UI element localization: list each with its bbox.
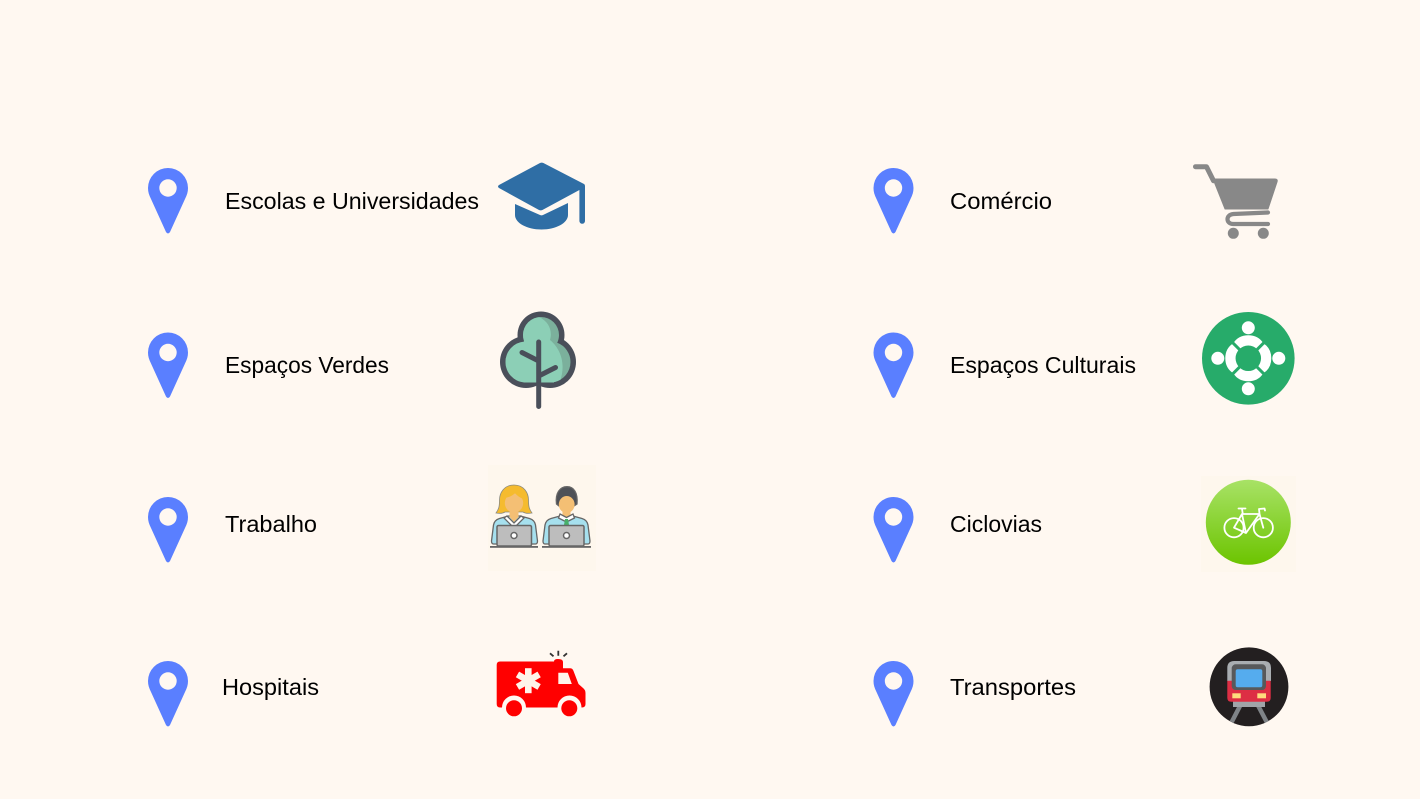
label: Ciclovias [950, 511, 1042, 537]
list item: Comércio [874, 167, 1277, 239]
icon: graduation cap [498, 163, 585, 230]
icon: location pin [148, 332, 188, 398]
label: Espaços Culturais [950, 352, 1136, 378]
list item: Ciclovias [874, 476, 1296, 572]
label: Transportes [950, 674, 1076, 700]
label: Escolas e Universidades [225, 188, 479, 214]
icon: people around a table [1202, 312, 1295, 405]
list item: Trabalho [148, 465, 596, 571]
list item: Espaços Culturais [874, 312, 1295, 405]
icon: shopping cart [1196, 167, 1277, 239]
icon: location pin [874, 168, 914, 234]
icon: ambulance [497, 651, 586, 716]
icon: location pin [874, 332, 914, 398]
woman [492, 485, 538, 546]
icon: location pin [874, 661, 914, 726]
list item: Hospitais [148, 651, 586, 726]
icon: bicycle badge [1201, 476, 1296, 572]
icon: location pin [874, 497, 914, 562]
label: Comércio [950, 188, 1052, 214]
list item: Transportes [874, 647, 1288, 726]
icon: location pin [148, 168, 188, 234]
icon: two workers with laptops [488, 465, 596, 571]
icon: location pin [148, 661, 188, 726]
label: Espaços Verdes [225, 352, 389, 378]
list item: Escolas e Universidades [148, 163, 585, 234]
label: Trabalho [225, 511, 317, 537]
icon: location pin [148, 497, 188, 562]
list item: Espaços Verdes [148, 305, 580, 406]
icon: metro train badge [1210, 647, 1288, 726]
man [543, 487, 590, 546]
icon: tree [500, 312, 576, 409]
label: Hospitais [222, 674, 319, 700]
